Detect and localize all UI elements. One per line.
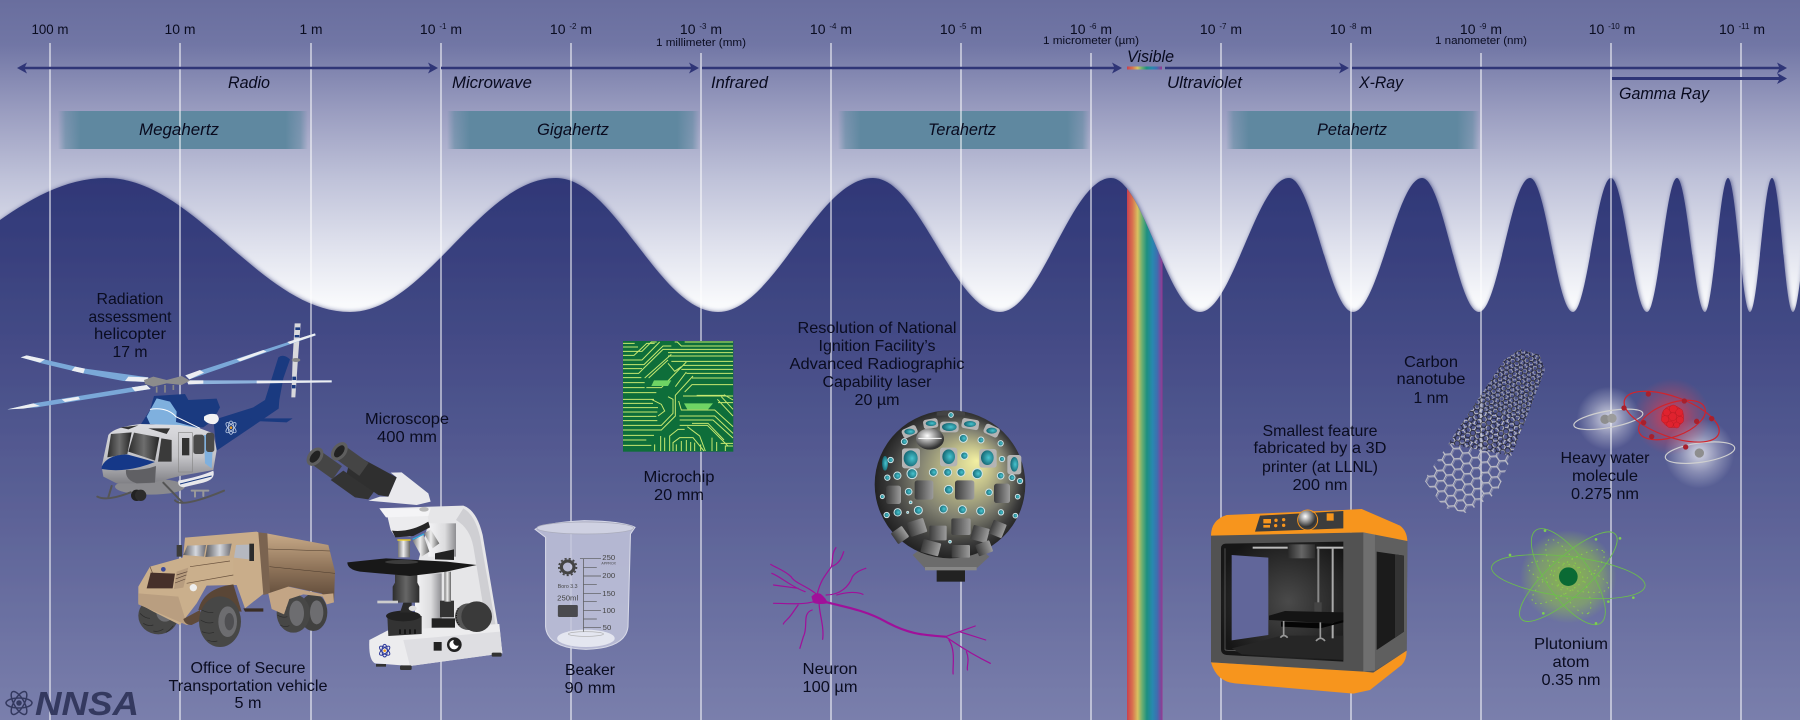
- plutonium label: atom: [1552, 654, 1590, 671]
- plutonium label: [1534, 636, 1608, 689]
- label: 10^-11 m: -11: [1738, 22, 1750, 31]
- label: 10^-4 m: m: [837, 21, 852, 37]
- middle mesh: [1448, 408, 1526, 456]
- deuterium atom right: [1664, 438, 1736, 467]
- icon: beaker: 250ml: [557, 594, 579, 603]
- label: 10 m: 10 m: [164, 21, 196, 37]
- helicopter label: [88, 291, 172, 361]
- heavy water label: 0.275 nm: [1571, 486, 1639, 503]
- cowling: [139, 394, 220, 427]
- condenser: [393, 575, 419, 603]
- icon: helicopter: [7, 323, 332, 503]
- objectives: [398, 540, 410, 557]
- label: 10^-10 m: 10: [1589, 21, 1604, 37]
- label: 10^-6 m: -6: [1089, 22, 1097, 31]
- front wheel: [199, 596, 241, 647]
- power switch and knob: [434, 642, 442, 651]
- build plate: [1269, 611, 1343, 623]
- NIF label: Resolution of National: [798, 320, 956, 337]
- microscope label: 400 mm: [377, 429, 437, 446]
- carbon nanotube label: 1 nm: [1414, 390, 1448, 407]
- carbon nanotube label: Carbon: [1404, 354, 1458, 371]
- microchip label: Microchip: [644, 469, 715, 486]
- icon: carbon nanotube: [1424, 349, 1545, 514]
- windows: [183, 545, 206, 557]
- spectrum names: [139, 48, 1711, 139]
- beaker label: [564, 662, 616, 697]
- label: gigahertz: Gigahertz: [537, 121, 610, 139]
- exhaust: [204, 414, 219, 424]
- stand: [937, 567, 965, 582]
- label: x-ray: X-Ray: [1358, 74, 1405, 92]
- NIF label: Capability laser: [822, 374, 932, 391]
- maker mark: [561, 561, 574, 573]
- icon: microchip: [623, 341, 733, 452]
- cab: [177, 532, 264, 608]
- windows: [107, 432, 132, 457]
- arrow: x-ray: [1352, 62, 1787, 74]
- scale marks: [580, 559, 601, 632]
- logo atom: [6, 689, 32, 717]
- icon: microscope: [303, 439, 502, 670]
- label: 10^-1 m: -1: [439, 22, 447, 31]
- label: 10^-7 m: -7: [1219, 22, 1227, 31]
- helicopter label: assessment: [88, 309, 172, 326]
- oxygen nucleus: [1661, 405, 1684, 428]
- bottom orange shell: [1211, 651, 1407, 694]
- spectrum range arrows: [17, 62, 1787, 84]
- frequency bands: [58, 111, 1480, 149]
- side window: [1377, 552, 1404, 650]
- icon: beaker: [535, 521, 635, 649]
- arrow: microwave: [441, 62, 699, 74]
- deuterium atom left: [1572, 405, 1644, 434]
- label: 10^-9 m: 10: [1460, 21, 1476, 37]
- label: 10^-3 m: -3: [699, 22, 707, 31]
- bumper: [138, 593, 197, 625]
- label: 10^-8 m: -8: [1349, 22, 1357, 31]
- label: 10^-3 m: 10: [680, 21, 696, 37]
- label: petahertz: Petahertz: [1317, 121, 1388, 139]
- NNSA logo: [6, 685, 139, 720]
- plutonium label: Plutonium: [1534, 636, 1608, 653]
- label: 10^-9 m: m: [1487, 21, 1502, 37]
- label: 10^-2 m: -2: [569, 22, 577, 31]
- top cap: [937, 410, 965, 416]
- neuron label: 100 µm: [802, 679, 858, 696]
- label: 100 m: 100 m: [32, 21, 68, 37]
- focus rack: [432, 618, 455, 628]
- microscope label: Microscope: [365, 411, 449, 428]
- wheel arch: [198, 584, 242, 612]
- lower wide mesh: [1424, 444, 1512, 513]
- large ports: [901, 418, 1021, 474]
- NIF label: [790, 320, 964, 409]
- microchip label: 20 mm: [654, 487, 704, 504]
- icon: plutonium atom: [1489, 518, 1648, 636]
- axon: [824, 602, 945, 637]
- inner dotted orbits: [1525, 534, 1612, 619]
- green glow: [1520, 530, 1617, 623]
- microscope label: [365, 411, 449, 446]
- label: visible: Visible: [1127, 48, 1174, 66]
- NIF label: 20 µm: [854, 392, 900, 409]
- label: 10^-10 m: m: [1620, 21, 1635, 37]
- label: 10^-6 m: m: [1097, 21, 1112, 37]
- label: radio: Radio: [228, 74, 270, 92]
- icon: beaker: 150: [602, 589, 615, 598]
- icon: beaker: APPROX: [601, 561, 617, 565]
- truck label: 5 m: [234, 695, 262, 712]
- cargo box: [267, 533, 335, 602]
- label: 10^-1 m: 10: [420, 21, 436, 37]
- cabin: [102, 424, 217, 483]
- label: 10^-11 m: m: [1749, 21, 1765, 37]
- wave: [0, 178, 1800, 720]
- icon: beaker: 200: [602, 571, 615, 580]
- label: 10^-5 m: -5: [959, 22, 967, 31]
- build chamber: [1221, 542, 1343, 662]
- NIF label: Ignition Facility’s: [818, 338, 936, 355]
- glass body: [535, 521, 635, 649]
- glows: [1577, 387, 1640, 450]
- axon terminals: [945, 626, 990, 674]
- lower blocks: [886, 480, 1010, 558]
- label: 10^-2 m: 10: [550, 21, 566, 37]
- neuron label: [802, 661, 858, 696]
- visible rainbow column: [1127, 170, 1162, 720]
- label: 1 nanometer: 1 nanometer (nm): [1435, 35, 1527, 47]
- circuit traces: [623, 342, 733, 451]
- icon: beaker: 250: [602, 553, 615, 562]
- 3D printer label: [1254, 423, 1386, 494]
- stage: [347, 558, 477, 576]
- band: megahertz: [58, 111, 308, 149]
- label: 10^-3 m: m: [707, 21, 722, 37]
- eyepieces: [331, 471, 374, 499]
- label: microwave: Microwave: [452, 74, 532, 92]
- arrow: radio: [17, 62, 438, 74]
- tail rotor: [291, 323, 301, 397]
- nose: [102, 454, 155, 470]
- label: 10^-5 m: m: [967, 21, 982, 37]
- oxygen orbits: [1618, 381, 1725, 453]
- truck label: [168, 660, 328, 712]
- upper fine mesh: [1472, 349, 1545, 419]
- arrow: infrared: [702, 62, 1122, 74]
- icon: heavy water molecule: [1572, 378, 1736, 488]
- rear wheels: [299, 594, 327, 631]
- base: [369, 624, 502, 666]
- label: 10^-4 m: -4: [829, 22, 837, 31]
- beaker label: 90 mm: [564, 680, 616, 697]
- label: 10^-11 m: 10: [1719, 21, 1735, 37]
- label: 10^-7 m: m: [1227, 21, 1242, 37]
- dendrites: [771, 548, 866, 648]
- helicopter label: helicopter: [94, 326, 167, 343]
- label: 10^-6 m: 10: [1070, 21, 1086, 37]
- carbon nanotube label: nanotube: [1396, 371, 1466, 388]
- icon: beaker: 100: [602, 606, 615, 615]
- outer orbits: [1489, 518, 1648, 636]
- icon: neuron: [771, 548, 990, 674]
- soma: [811, 593, 828, 604]
- helicopter label: Radiation: [96, 291, 164, 308]
- underside: [115, 479, 185, 495]
- arm: [379, 506, 502, 657]
- grille: [147, 573, 175, 588]
- electrons: [1621, 391, 1714, 450]
- 3D printer label: 200 nm: [1292, 477, 1348, 494]
- label: 10^-2 m: m: [577, 21, 592, 37]
- heavy water label: Heavy water: [1560, 450, 1650, 467]
- carbon nanotube label: [1396, 354, 1466, 407]
- heavy water label: molecule: [1572, 468, 1638, 485]
- label: 10^-8 m: m: [1357, 21, 1372, 37]
- printer body: [1211, 532, 1407, 673]
- nucleus: [1559, 567, 1578, 586]
- step and side panels: [243, 608, 263, 612]
- truck label: Office of Secure: [190, 660, 306, 677]
- tail boom and fin: [213, 356, 290, 451]
- microchip label: [644, 469, 715, 504]
- icon: armored transport truck: [138, 532, 335, 647]
- lower lamp ring: [387, 616, 422, 636]
- control panel: [1255, 511, 1343, 532]
- column recess: [428, 523, 456, 557]
- band: petahertz: [1226, 111, 1480, 149]
- plutonium label: 0.35 nm: [1542, 672, 1600, 689]
- arrow: gamma ray: [1612, 73, 1787, 84]
- label: 10^-4 m: 10: [810, 21, 826, 37]
- NIF label: Advanced Radiographic: [790, 356, 964, 373]
- main rotor blades: [21, 355, 148, 382]
- wavelength scale labels: [32, 21, 1765, 49]
- heavy water label: [1560, 450, 1650, 503]
- beaker label: Beaker: [565, 662, 616, 679]
- label: 10^-10 m: -10: [1608, 22, 1620, 31]
- label: 10^-8 m: 10: [1330, 21, 1346, 37]
- helicopter label: 17 m: [112, 344, 148, 361]
- top orange shell: [1211, 509, 1407, 541]
- nosepiece: [387, 514, 429, 537]
- 3D printer label: Smallest feature: [1262, 423, 1378, 440]
- print head and rods: [1253, 547, 1288, 549]
- label: 10^-5 m: 10: [940, 21, 956, 37]
- band: terahertz: [838, 111, 1090, 149]
- label: 1 micrometer: 1 micrometer (µm): [1043, 35, 1139, 47]
- dome port: [916, 428, 944, 450]
- label: 1 m: 1 m: [300, 21, 322, 37]
- band: gigahertz: [447, 111, 700, 149]
- head: [379, 508, 431, 517]
- label: 10^-1 m: m: [447, 21, 462, 37]
- sphere: [875, 410, 1025, 558]
- small ports: [880, 413, 1023, 543]
- label: 1 millimeter: 1 millimeter (mm): [656, 37, 746, 49]
- electrons: [1509, 529, 1635, 625]
- label: megahertz: Megahertz: [139, 121, 220, 139]
- neuron label: Neuron: [802, 661, 858, 678]
- truck label: Transportation vehicle: [168, 678, 328, 695]
- front left wheel: [138, 597, 178, 634]
- icon: beaker: Boro 3.3: [558, 584, 578, 590]
- label: terahertz: Terahertz: [928, 121, 997, 139]
- label: ultraviolet: Ultraviolet: [1167, 74, 1243, 92]
- icon: 3D printer: [1211, 509, 1407, 694]
- label: 10^-9 m: -9: [1479, 22, 1487, 31]
- door and side windows: [178, 433, 192, 472]
- arrow: ultraviolet: [1165, 62, 1349, 74]
- visible spectrum strip: [1127, 66, 1162, 70]
- label: gamma ray: Gamma Ray: [1619, 85, 1711, 103]
- chamber floor: [1232, 636, 1343, 660]
- icon: beaker: 50: [603, 623, 611, 632]
- fuel pod: [178, 471, 214, 487]
- dark back-wall mesh: [1448, 349, 1545, 456]
- icon: NIF target chamber sphere: [875, 410, 1025, 582]
- rotor hub: [144, 376, 190, 387]
- see-through window: [1232, 555, 1268, 640]
- skids: [97, 483, 224, 503]
- hood: [138, 557, 233, 625]
- chip board: [623, 341, 733, 452]
- nose gear: [131, 490, 142, 501]
- 3D printer label: printer (at LLNL): [1262, 459, 1378, 476]
- label: 10^-7 m: 10: [1200, 21, 1216, 37]
- logo atom: [378, 644, 391, 657]
- 3D printer label: fabricated by a 3D: [1254, 440, 1386, 457]
- focus knob: [455, 603, 482, 630]
- label: infrared: Infrared: [711, 74, 769, 92]
- dark lower mesh: [1425, 445, 1513, 514]
